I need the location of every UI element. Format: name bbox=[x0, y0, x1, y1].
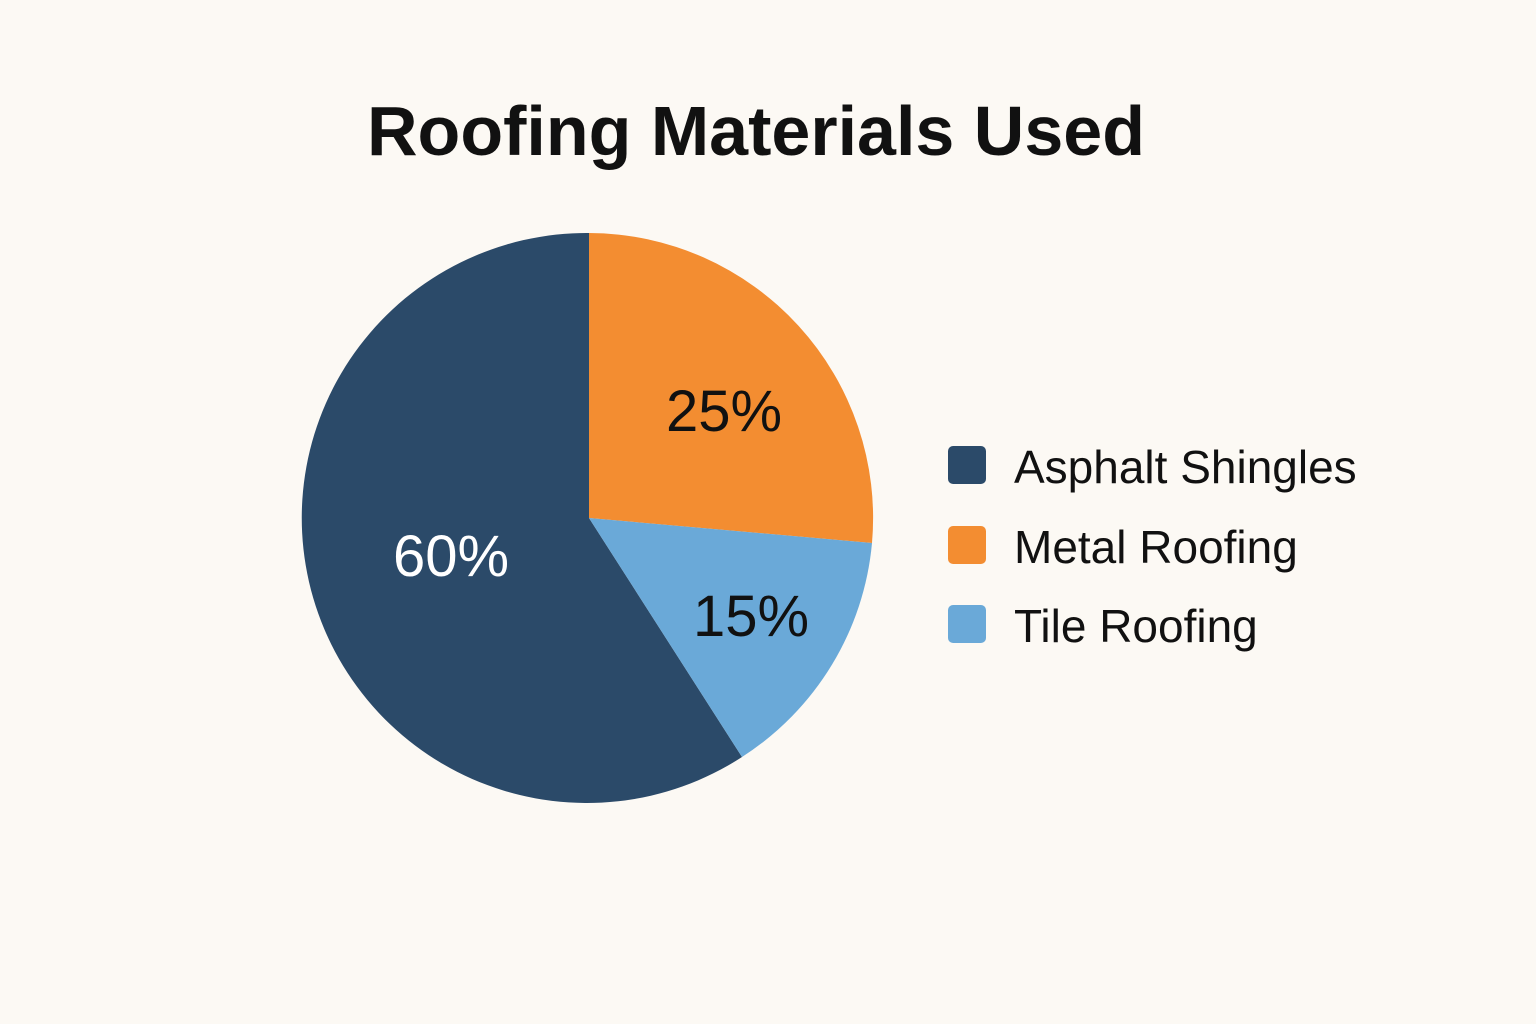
legend item: metal roofing: Metal Roofing bbox=[1014, 521, 1298, 573]
pie chart bbox=[302, 233, 873, 803]
legend item: asphalt shingles: Asphalt Shingles bbox=[1014, 441, 1357, 493]
label 25%: 25% bbox=[666, 379, 782, 444]
label 60%: 60% bbox=[393, 524, 509, 589]
legend bbox=[948, 441, 1357, 652]
slice: asphalt shingles 60% bbox=[302, 233, 742, 803]
legend item: tile roofing: Tile Roofing bbox=[1014, 600, 1258, 652]
slice: metal roofing 25% bbox=[589, 233, 873, 543]
label 15%: 15% bbox=[693, 584, 809, 649]
slice: tile roofing 15% bbox=[589, 518, 872, 757]
title: Roofing Materials Used bbox=[367, 92, 1145, 170]
